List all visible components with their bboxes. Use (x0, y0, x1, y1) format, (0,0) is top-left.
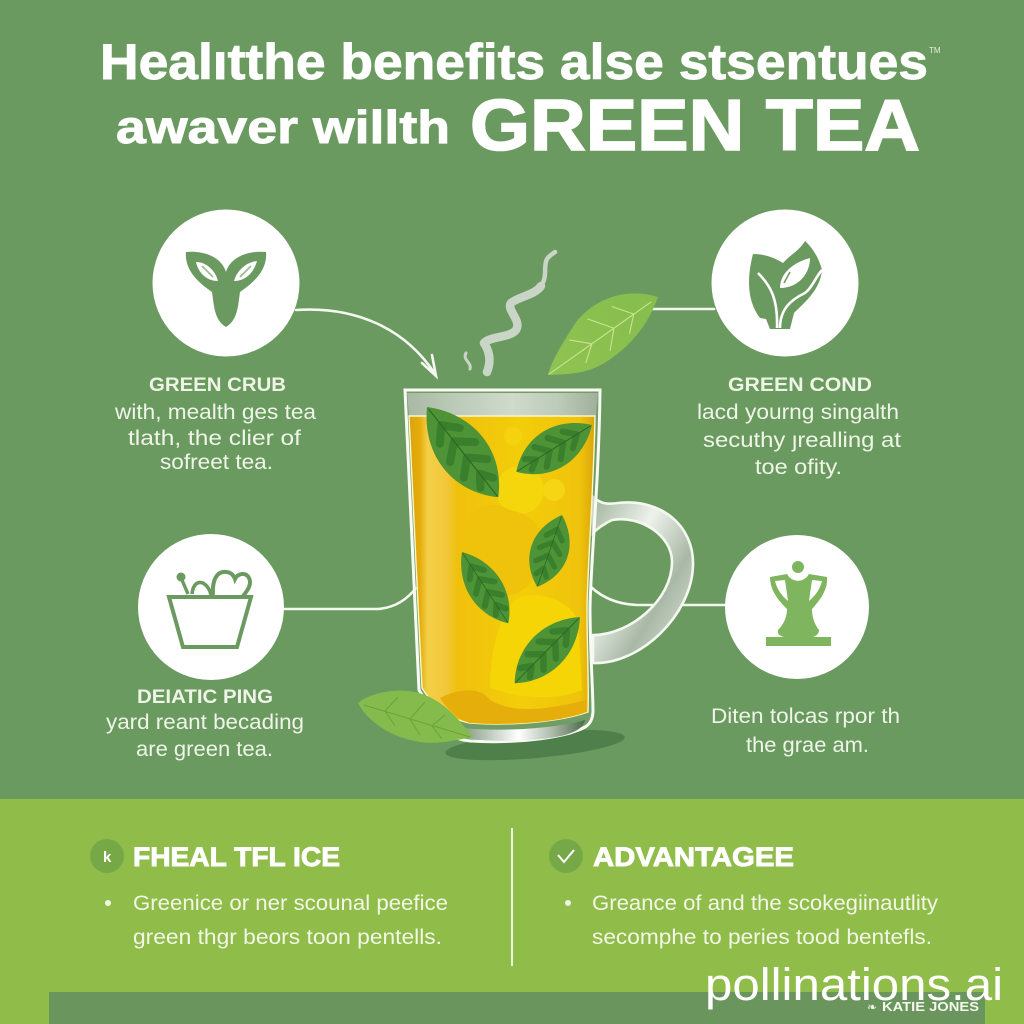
body text: Diten tolcas rpor th (711, 705, 900, 728)
icon: check badge (549, 839, 583, 873)
connector lines (284, 309, 726, 609)
credit: katie jones: ❧ (867, 1000, 877, 1014)
panel: deiatic ping (106, 534, 304, 761)
body text: lacd yourng singalth (697, 401, 899, 424)
shadow under glass (444, 724, 626, 766)
body text: secuthy ȷrealling at (703, 429, 901, 452)
connector: top-right circle (650, 308, 714, 310)
icon: sprout circle (152, 210, 300, 356)
title emphasis: green tea: GREEN TEA (470, 86, 920, 166)
trademark mark: TM (929, 46, 941, 55)
icon: badge (90, 839, 124, 873)
body text (133, 892, 448, 949)
arrow: top-left circle to glass (296, 310, 436, 376)
panel: green crub (114, 210, 316, 474)
body text (106, 711, 304, 761)
heading: FHEAL TFL ICE (133, 842, 340, 872)
floating leaf 5 (501, 604, 593, 696)
body text (592, 892, 939, 949)
floating leaf 4 (448, 543, 523, 633)
body text (697, 401, 901, 479)
bullet (105, 900, 111, 906)
divider (511, 828, 513, 966)
body text: green thgr beors toon pentells. (133, 926, 442, 949)
heading: ADVANTAGEE (593, 842, 794, 872)
connector: bottom-left circle (284, 588, 416, 609)
body text: the grae am. (746, 734, 869, 757)
body text: Greance of and the scokegiinautlity (592, 892, 939, 915)
heading: GREEN CRUB (149, 375, 286, 396)
panel: bottom band (0, 799, 1024, 1024)
body text: are green tea. (136, 738, 273, 761)
resting leaf (358, 691, 473, 743)
credit: katie jones: KATIE JONES (882, 999, 979, 1014)
title (100, 34, 941, 166)
connector: bottom-right circle (591, 587, 726, 605)
floating leaf 3 (519, 509, 580, 593)
glass base (452, 720, 585, 741)
floating leaf 2 (506, 408, 603, 489)
icon: leaf circle (712, 210, 858, 356)
bullet (565, 900, 571, 906)
body text: yard reant becading (106, 711, 304, 734)
body text: with, mealth ges tea (114, 401, 316, 424)
glass body (405, 390, 600, 742)
body text (114, 401, 316, 474)
tea liquid (409, 416, 595, 724)
heading: GREEN COND (728, 375, 872, 396)
body text: sofreet tea. (160, 451, 273, 474)
glass rim (407, 393, 598, 416)
title line two: awaver willth (116, 101, 450, 153)
heading: DEIATIC PING (137, 687, 273, 708)
body text (711, 705, 900, 757)
body text: toe ofity. (755, 456, 842, 479)
panel: advantagee (549, 839, 939, 949)
leaf above the glass (530, 273, 671, 394)
floating leaf 1 (407, 391, 518, 513)
liquid highlights (440, 427, 587, 724)
watermark: pollinations.ai: pollinations.ai (705, 959, 1003, 1010)
body text: tlath, the clier of (128, 427, 301, 450)
panel: fheal tfl ice (90, 839, 448, 949)
icon: basket circle (138, 534, 284, 680)
glass of green tea (358, 390, 693, 743)
panel: green cond (697, 210, 901, 479)
steam (465, 252, 555, 372)
footer bar (49, 992, 985, 1024)
icon: badge: k (103, 849, 112, 866)
body text: secomphe to peries tood bentefls. (592, 926, 932, 949)
body text: Greenice or ner scounal peefice (133, 892, 448, 915)
title line one: Healıtthe benefits alse stsentues (100, 34, 928, 90)
panel: trophy note (711, 535, 900, 757)
mug handle (593, 497, 693, 663)
icon: trophy circle (725, 535, 869, 679)
